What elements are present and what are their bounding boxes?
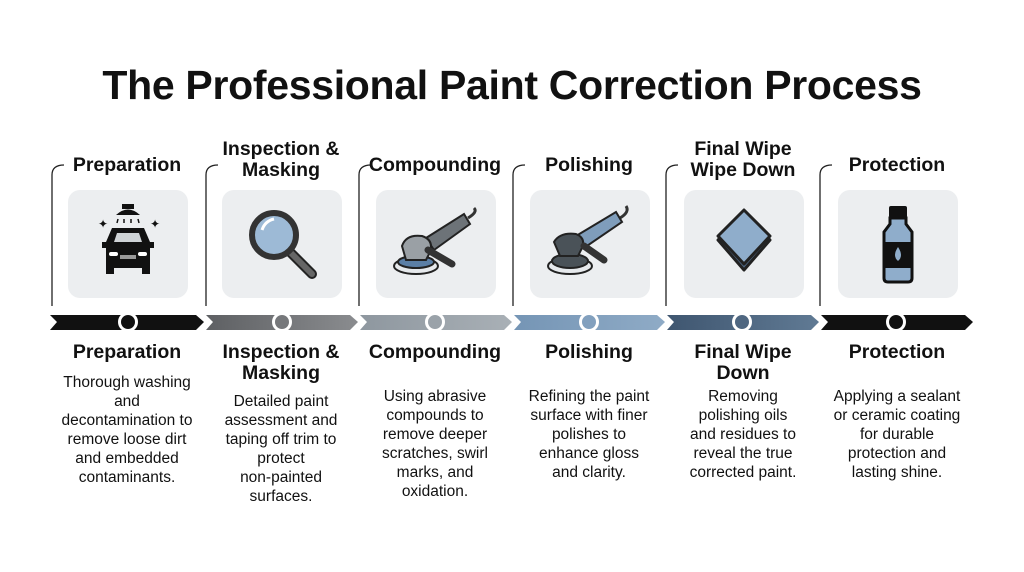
- text: final wipe description: Removing: [708, 388, 778, 405]
- icon: microfiber pad: [684, 190, 804, 298]
- heading: compounding detail: Compounding: [369, 341, 501, 363]
- panel: compounding: [369, 154, 501, 500]
- heading: inspection detail: Inspection &: [222, 341, 340, 363]
- text: compounding description: scratches, swirl: [382, 445, 488, 462]
- heading: compounding: Compounding: [369, 154, 501, 176]
- text: polishing description: and clarity.: [552, 464, 626, 481]
- text: inspection description: non-painted: [240, 469, 322, 486]
- heading: final wipe: Final Wipe: [694, 138, 792, 160]
- text: preparation description: remove loose dirt: [68, 431, 186, 448]
- heading: preparation: Preparation: [73, 154, 181, 176]
- text: preparation description: and: [114, 393, 140, 410]
- text: final wipe description: and residues to: [690, 426, 796, 443]
- heading: protection detail: Protection: [849, 341, 945, 363]
- icon: polisher: [530, 190, 650, 298]
- text: inspection description: [225, 393, 337, 505]
- heading: final wipe: Wipe Down: [691, 159, 795, 181]
- text: polishing description: Refining the paint: [529, 388, 649, 405]
- text: protection description: Applying a sealant: [834, 388, 960, 405]
- text: polishing description: enhance gloss: [539, 445, 639, 462]
- text: inspection description: Detailed paint: [234, 393, 328, 410]
- text: inspection description: protect: [257, 450, 305, 467]
- text: preparation description: Thorough washing: [63, 374, 191, 391]
- panel: preparation: [62, 154, 192, 486]
- text: protection description: or ceramic coating: [834, 407, 960, 424]
- icon: car wash: ✦: [98, 217, 108, 231]
- heading: protection: Protection: [849, 154, 945, 176]
- text: protection description: for durable: [860, 426, 934, 443]
- text: final wipe description: reveal the true: [693, 445, 793, 462]
- text: inspection description: taping off trim to: [226, 431, 336, 448]
- text: final wipe description: [690, 388, 796, 481]
- text: inspection description: assessment and: [225, 412, 337, 429]
- text: compounding description: remove deeper: [383, 426, 487, 443]
- text: final wipe description: polishing oils: [699, 407, 787, 424]
- text: compounding description: Using abrasive: [384, 388, 486, 405]
- text: preparation description: contaminants.: [79, 469, 175, 486]
- arrow band: [50, 314, 973, 330]
- text: polishing description: polishes to: [552, 426, 626, 443]
- text: compounding description: marks, and: [397, 464, 473, 481]
- text: preparation description: and embedded: [75, 450, 179, 467]
- heading: final wipe: [690, 138, 795, 181]
- heading: inspection detail: [222, 341, 340, 384]
- heading: final wipe detail: Down: [716, 362, 770, 384]
- text: inspection description: surfaces.: [250, 488, 312, 505]
- panel: inspection: [222, 138, 342, 505]
- text: polishing description: [529, 388, 650, 481]
- icon: coating bottle: [838, 190, 958, 298]
- text: protection description: lasting shine.: [852, 464, 942, 481]
- heading: final wipe detail: [694, 341, 792, 384]
- heading: inspection: Inspection &: [222, 138, 340, 160]
- text: preparation description: decontamination to: [62, 412, 192, 429]
- panel: polishing: [529, 154, 650, 481]
- text: compounding description: compounds to: [386, 407, 484, 424]
- panel: protection: [834, 154, 960, 481]
- text: final wipe description: corrected paint.: [690, 464, 796, 481]
- title: The Professional Paint Correction Process: [102, 62, 922, 108]
- icon: car wash: [68, 190, 188, 298]
- text: compounding description: [382, 388, 488, 500]
- text: polishing description: surface with finer: [530, 407, 648, 424]
- heading: inspection detail: Masking: [242, 362, 320, 384]
- text: preparation description: [62, 374, 192, 486]
- heading: inspection: Masking: [242, 159, 320, 181]
- text: protection description: [834, 388, 960, 481]
- text: compounding description: oxidation.: [402, 483, 468, 500]
- heading: final wipe detail: Final Wipe: [694, 341, 792, 363]
- heading: preparation detail: Preparation: [73, 341, 181, 363]
- heading: inspection: [222, 138, 340, 181]
- heading: polishing: Polishing: [545, 154, 633, 176]
- text: protection description: protection and: [848, 445, 946, 462]
- icon: car wash: ✦: [150, 217, 160, 231]
- heading: polishing detail: Polishing: [545, 341, 633, 363]
- panel: final wipe: [684, 138, 804, 481]
- icon: magnifier: [222, 190, 342, 298]
- icon: polisher: [376, 190, 496, 298]
